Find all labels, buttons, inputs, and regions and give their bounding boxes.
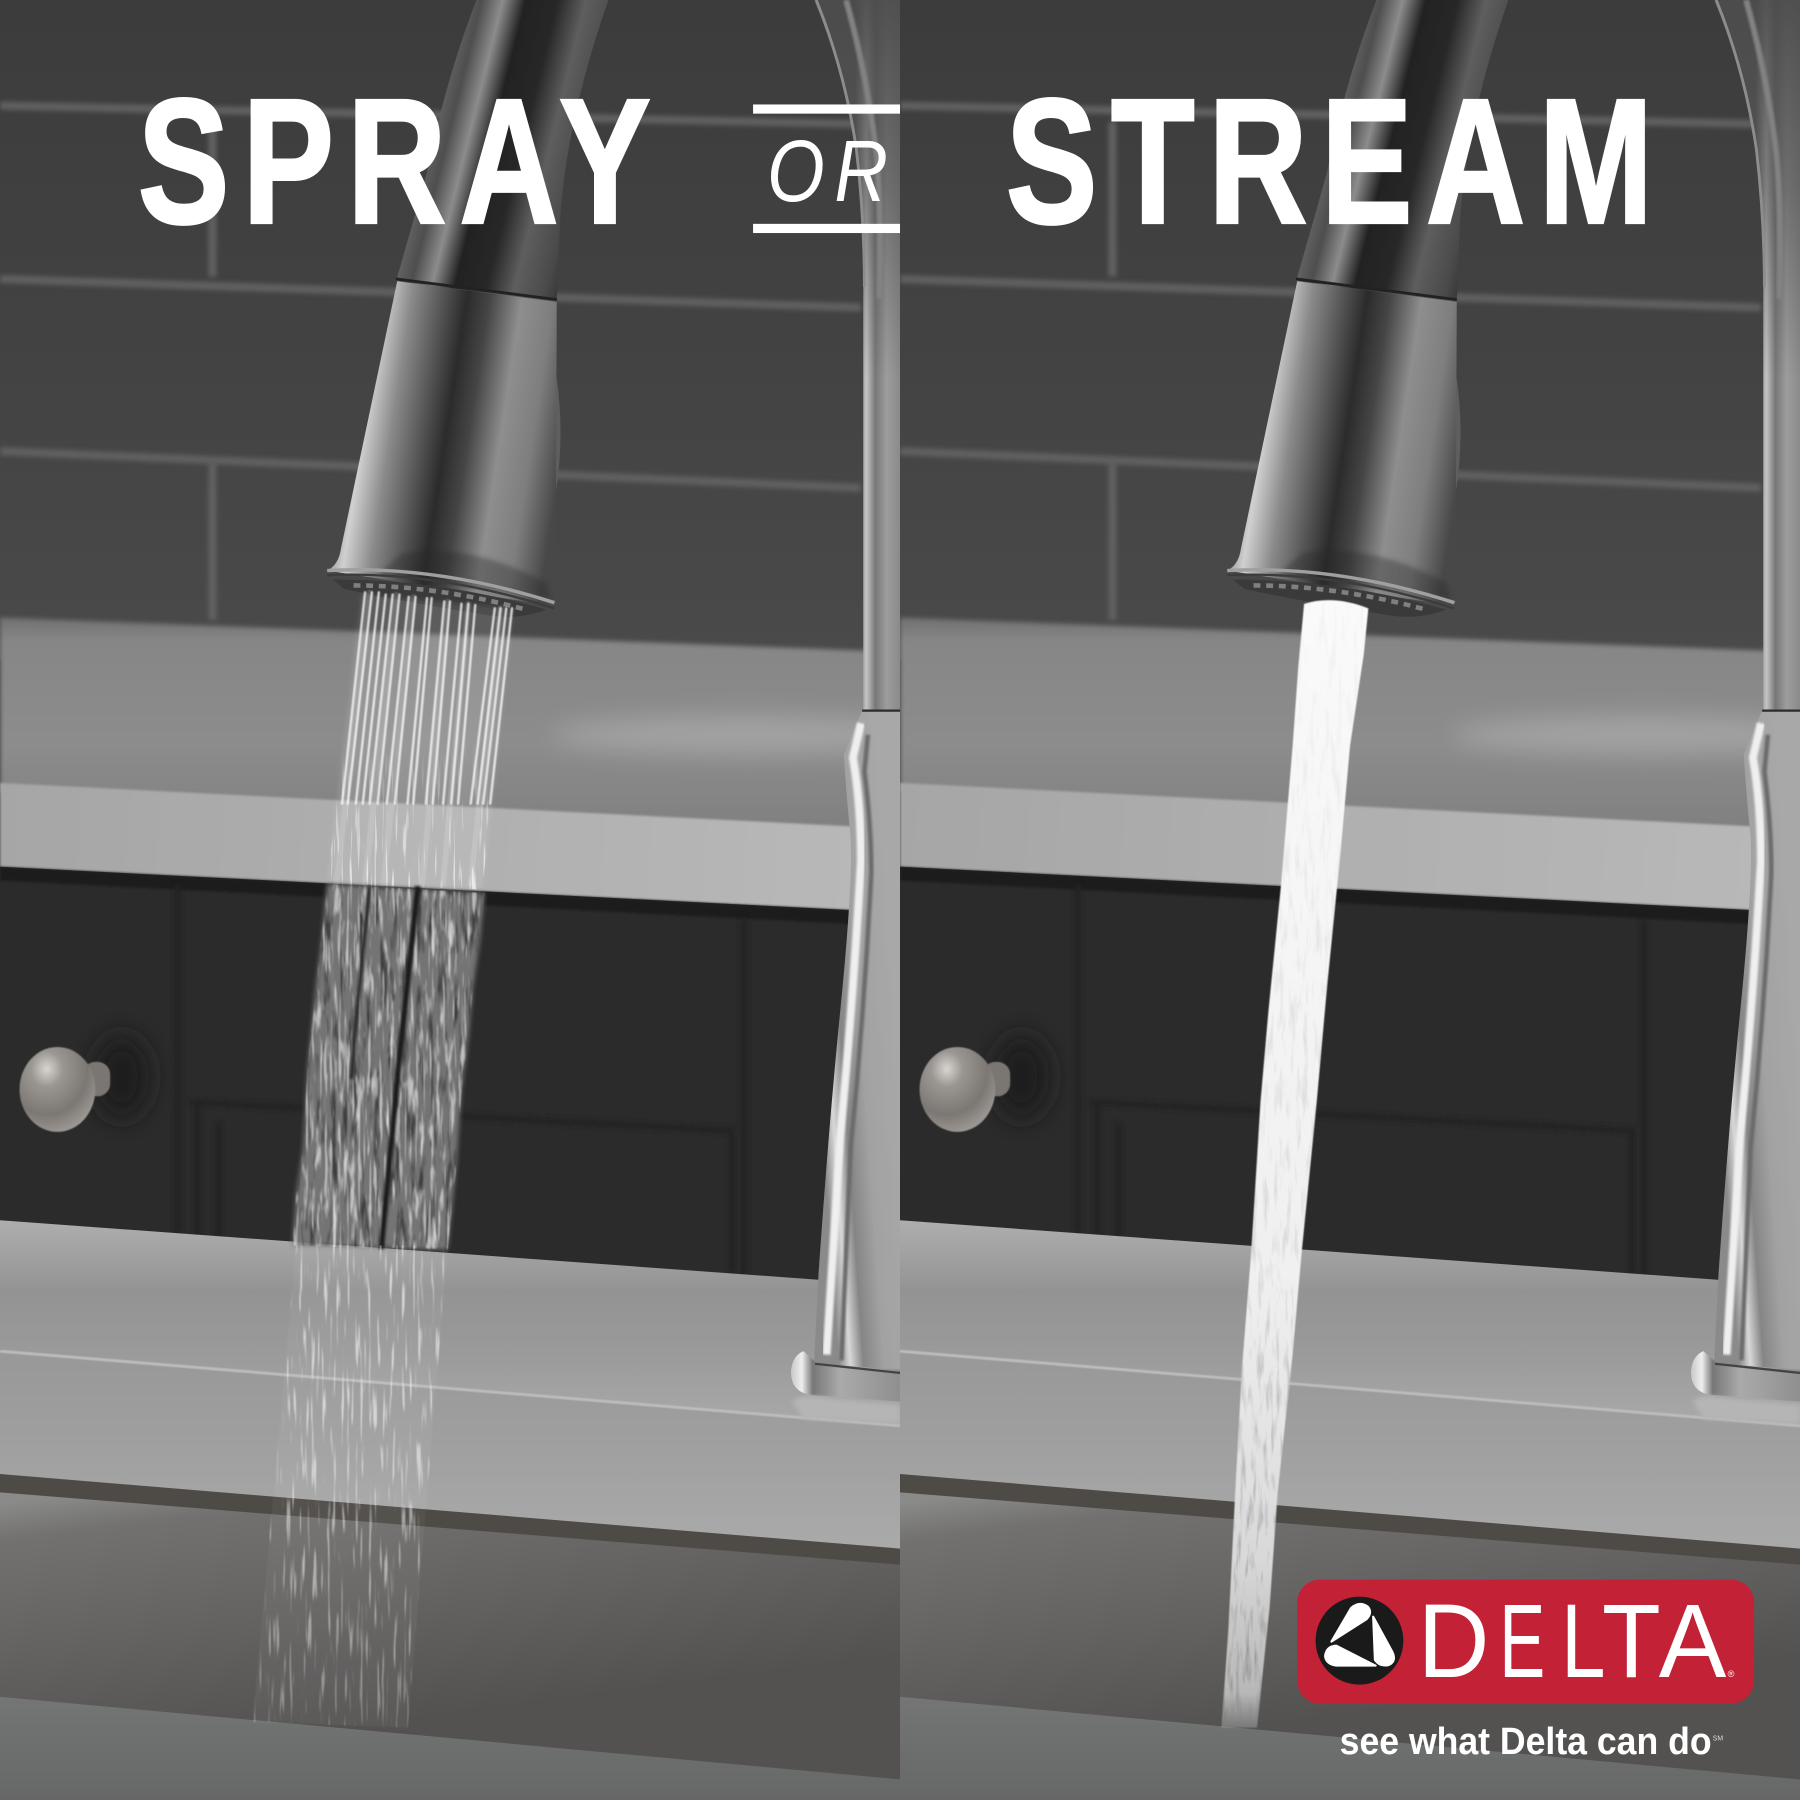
shadow gap — [0, 1474, 900, 1566]
icon: Delta triangle mark — [1316, 1597, 1403, 1685]
spray upper strands — [336, 592, 512, 884]
stream water — [1221, 600, 1368, 1728]
registered mark: ® — [1728, 1669, 1735, 1679]
divider: OR: OR — [767, 123, 888, 220]
panel: kitchen background (stream side) — [900, 0, 1800, 1800]
gooseneck spout — [814, 0, 900, 714]
spray water — [253, 592, 513, 1728]
logo wordmark — [1418, 1583, 1727, 1700]
basin — [0, 1697, 900, 1800]
sink face — [0, 1492, 900, 1779]
title: STREAM: STREAM — [1006, 61, 1653, 261]
spray mid section over cabinet — [293, 884, 484, 1249]
spray lower droplets — [253, 1246, 448, 1728]
icon: cabinet knob — [20, 1047, 110, 1132]
title: SPRAY: SPRAY — [138, 61, 651, 261]
logo wordmark: T — [1602, 1583, 1661, 1700]
logo wordmark: L — [1561, 1583, 1605, 1700]
faucet flange — [791, 1351, 900, 1423]
panel: kitchen background (spray side) — [0, 0, 941, 1800]
tagline: SM — [1713, 1735, 1723, 1742]
spray head — [327, 281, 561, 617]
logo wordmark: D — [1418, 1583, 1489, 1700]
spout neck — [396, 0, 608, 301]
countertop edge — [0, 783, 900, 915]
countertop front face — [0, 1351, 900, 1551]
faucet base — [814, 711, 900, 1378]
spray haze — [327, 595, 513, 890]
logo: Delta — [1297, 1580, 1754, 1704]
cabinet doors — [0, 867, 900, 1291]
lower countertop surface — [0, 1220, 900, 1429]
tagline: see what Delta can do — [1340, 1721, 1712, 1763]
logo wordmark: E — [1499, 1583, 1545, 1700]
spray breakup streaks — [327, 735, 499, 890]
logo wordmark: A — [1659, 1583, 1727, 1700]
knob shadow — [94, 1035, 149, 1118]
divider: OR — [753, 104, 900, 233]
back countertop — [0, 618, 941, 844]
tile backsplash — [0, 0, 900, 660]
